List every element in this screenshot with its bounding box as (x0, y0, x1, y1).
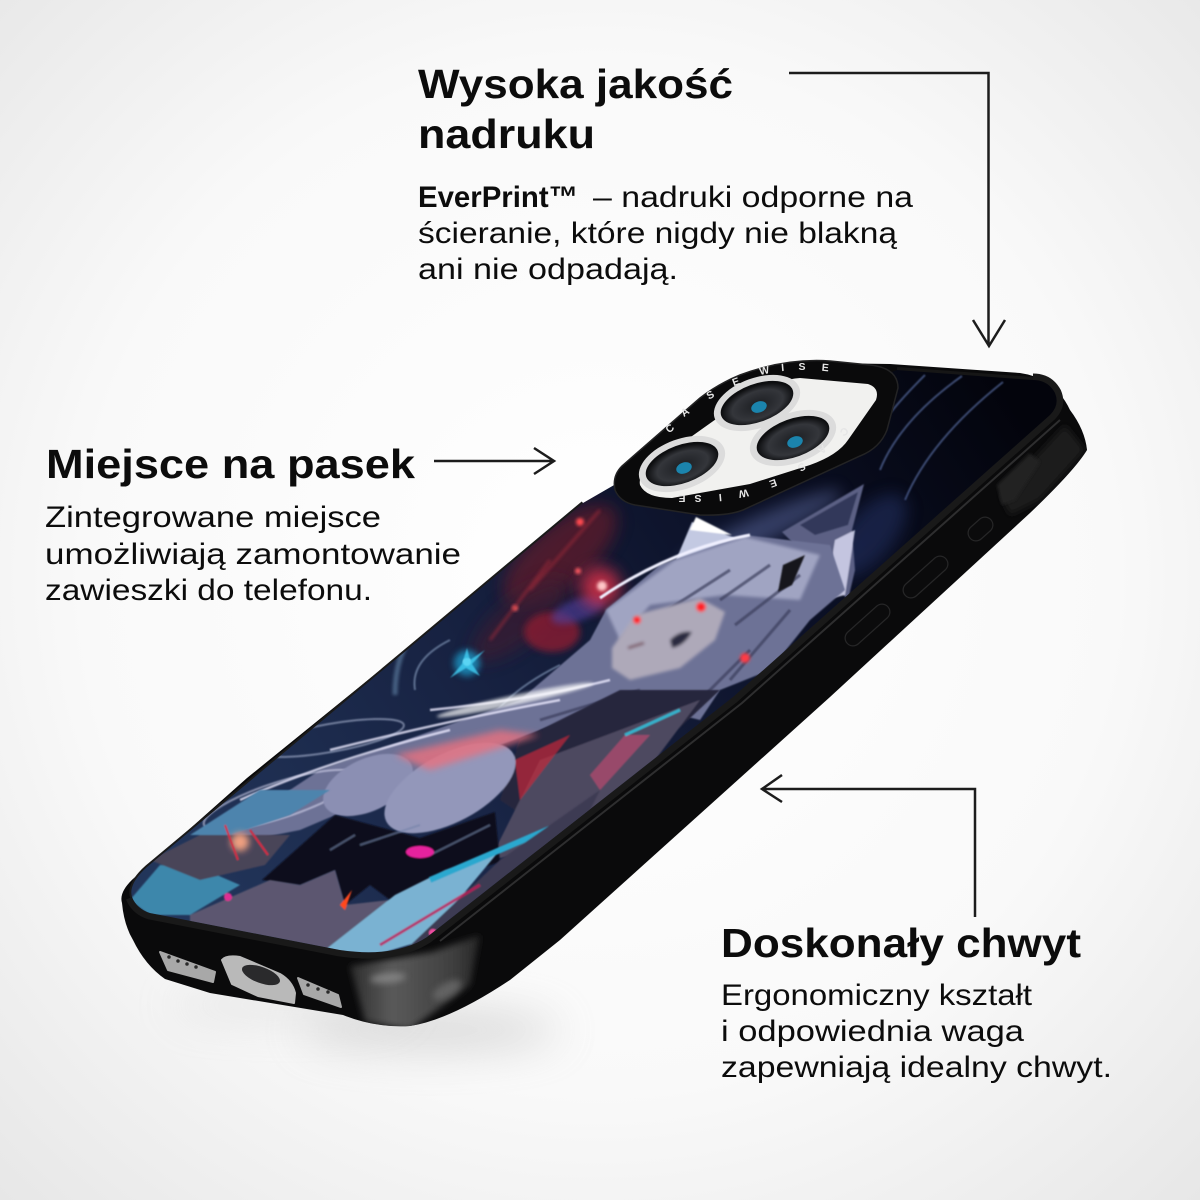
text: strap mount: zawieszki do telefonu. (45, 574, 372, 607)
case body (121, 363, 1087, 1026)
casewise lettering: A (679, 405, 692, 420)
casewise lettering (663, 361, 851, 504)
lens top (706, 364, 808, 442)
heading: print quality: Wysoka jakość (418, 61, 733, 107)
casewise lettering: I (781, 362, 785, 374)
bottom left speaker (160, 952, 215, 982)
callout: strap mount (45, 441, 461, 607)
casewise lettering: E (768, 476, 778, 490)
phone shadow (170, 993, 560, 1050)
abstract figure: face (612, 598, 750, 680)
text: strap mount (45, 501, 461, 607)
casewise lettering: E (678, 492, 686, 504)
abstract figure: hair (198, 535, 845, 850)
phone case (100, 350, 1100, 1030)
callout: print quality (418, 61, 913, 286)
screen rim (131, 369, 1060, 952)
case side details (350, 425, 1085, 1030)
casewise lettering: I (718, 491, 722, 503)
text: grip: zapewniają idealny chwyt. (721, 1051, 1112, 1084)
text: print quality: ścieranie, które nigdy nie blakną (418, 217, 897, 250)
casewise lettering: W (738, 486, 749, 500)
casewise lettering: C (663, 421, 677, 436)
casewise lettering: E (821, 362, 829, 374)
text: grip: i odpowiednia waga (721, 1015, 1024, 1048)
text: print quality: – nadruki odporne na (593, 181, 913, 214)
heading: grip: Doskonały chwyt (721, 920, 1081, 966)
lens right (742, 399, 844, 477)
callout: grip (721, 920, 1112, 1084)
heading: strap mount: Miejsce na pasek (46, 441, 415, 487)
casewise lettering: A (815, 442, 829, 457)
camera bump (614, 361, 898, 515)
text: print quality: ani nie odpadają. (418, 253, 678, 286)
heading: print quality (418, 61, 733, 157)
mute switch (997, 453, 1040, 505)
abstract figure: ears (676, 484, 864, 600)
casewise lettering: W (758, 364, 771, 378)
heading: print quality: nadruku (418, 111, 595, 157)
text: grip: Ergonomiczny kształt (721, 979, 1033, 1012)
abstract figure: dark garment (262, 812, 500, 905)
printed artwork (131, 370, 1056, 952)
abstract figure: lower artwork (130, 790, 600, 960)
casewise lettering: S (704, 388, 717, 402)
casewise lettering: C (837, 424, 851, 439)
text: strap mount: Zintegrowane miejsce (45, 501, 381, 534)
arrow: grip (762, 775, 975, 917)
text: strap mount: umożliwiają zamontowanie (45, 538, 461, 571)
arrow: strap mount (434, 448, 554, 474)
nebula glow (395, 375, 1003, 720)
casewise lettering: S (798, 361, 806, 373)
casewise lettering: E (731, 375, 741, 389)
text: grip (721, 979, 1112, 1084)
casewise lettering: S (795, 460, 808, 474)
text: print quality: EverPrint™ (418, 181, 578, 214)
charging port (222, 956, 295, 1003)
bottom right speaker (298, 978, 341, 1007)
lens left (631, 425, 733, 503)
text: print quality (418, 181, 913, 286)
side buttons (853, 525, 985, 638)
abstract figure: torso (314, 690, 720, 860)
camera opening (640, 378, 877, 498)
arrow: print quality (789, 73, 1005, 346)
casewise lettering: S (694, 492, 702, 504)
